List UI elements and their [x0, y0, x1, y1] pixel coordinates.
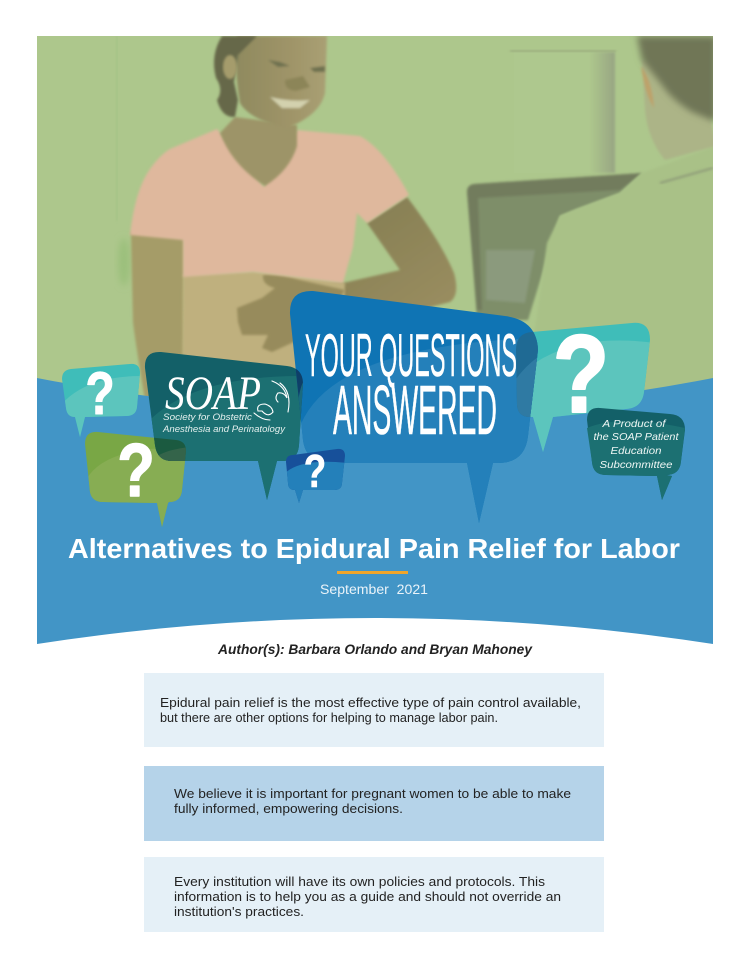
photo background wall	[37, 36, 713, 396]
woman's hand	[237, 275, 345, 352]
panel: epidural effectiveness: Epidural pain relief is the most effective type of pain control available,	[160, 695, 581, 710]
laptop	[467, 173, 642, 320]
panel: institution policies: institution's practices.	[174, 904, 304, 919]
panel: institution policies	[144, 857, 604, 932]
photo: woman and clinician	[37, 36, 716, 400]
heading bubble: your questions answered: ANSWERED	[333, 371, 497, 449]
icon: big question mark: ?	[553, 312, 609, 436]
SOAP wordmark: SOAP	[165, 367, 261, 420]
woman's neck	[220, 117, 297, 186]
woman's left arm	[131, 232, 184, 400]
date: September 2021	[320, 582, 428, 597]
man's back	[542, 174, 641, 273]
bubble: product of SOAP subcommittee	[587, 408, 685, 500]
heading bubble: teal question small	[62, 364, 140, 437]
heading bubble: teal question small: ?	[85, 360, 115, 427]
panel: epidural effectiveness: but there are other options for helping to manage labor pain.	[160, 710, 498, 725]
bubble: product of SOAP subcommittee: Subcommittee	[600, 459, 673, 471]
SOAP full name: Anesthesia and Perinatology	[162, 424, 286, 435]
woman's hair	[214, 36, 257, 117]
woman's belly	[182, 272, 346, 368]
panel: informed decisions	[144, 766, 604, 841]
overlap with green bubble	[154, 438, 186, 461]
woman's ear	[223, 55, 237, 79]
icon: green bubble question mark: ?	[117, 428, 155, 512]
authors: Author(s): Barbara Orlando and Bryan Mahoney	[217, 642, 534, 657]
bubble: product of SOAP subcommittee: Education	[610, 445, 662, 457]
SOAP full name	[162, 412, 286, 435]
bubble title text	[305, 322, 517, 449]
bubble: SOAP logo	[144, 352, 301, 500]
panel: informed decisions: We believe it is important for pregnant women to be able to make	[174, 786, 571, 801]
overlap with big teal bubble	[516, 332, 538, 417]
bubble: green question	[85, 432, 185, 527]
bubble: small blue question: ?	[304, 445, 326, 497]
SOAP full name: Society for Obstetric	[163, 412, 252, 423]
man's collar	[660, 168, 713, 183]
overlap with SOAP bubble	[296, 368, 303, 420]
SOAP mother and baby mark	[254, 381, 289, 420]
panel: institution policies: Every institution will have its own policies and protocols. This	[174, 874, 546, 889]
heading bubble: your questions answered	[285, 285, 545, 525]
man's hair	[637, 36, 716, 122]
bubble: product of SOAP subcommittee: the SOAP Patient	[594, 431, 680, 443]
title: Alternatives to Epidural Pain Relief for Labor	[68, 533, 680, 564]
blue title band	[37, 378, 713, 644]
panel: epidural effectiveness	[144, 673, 604, 747]
panel: institution policies: information is to help you as a guide and should not override an	[174, 889, 561, 904]
woman's face	[236, 36, 327, 128]
wall details	[116, 36, 616, 286]
orange divider	[337, 571, 408, 574]
bubble: small blue question	[286, 448, 345, 503]
man's skin and ear	[641, 60, 716, 160]
woman's pink shirt	[130, 129, 409, 283]
bubble: big teal question	[530, 322, 650, 452]
woman's right forearm	[342, 196, 458, 307]
panel: informed decisions: fully informed, empowering decisions.	[174, 801, 403, 816]
bubble: product of SOAP subcommittee: A Product of	[601, 418, 667, 430]
